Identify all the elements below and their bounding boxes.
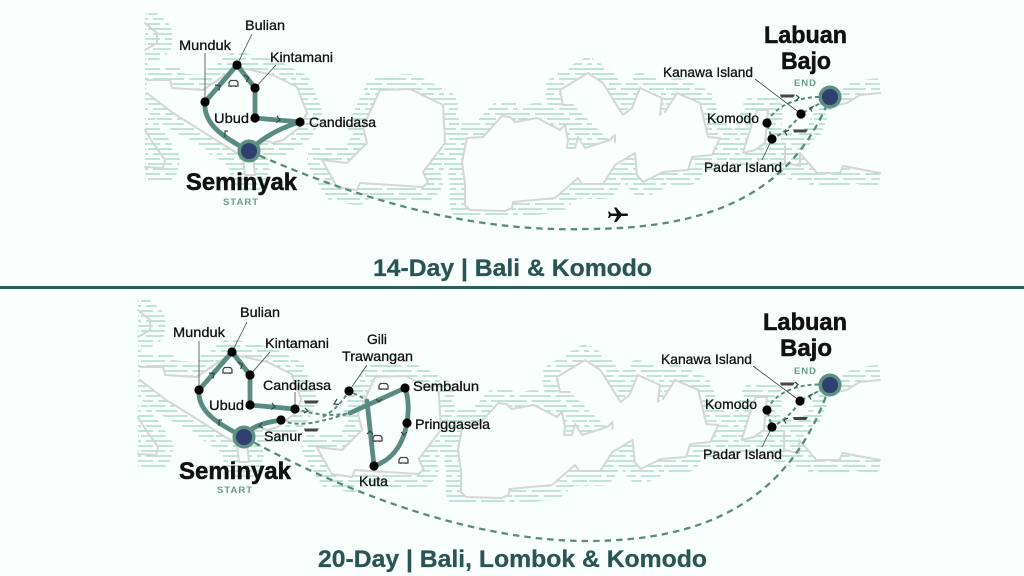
stop: Kanawa Island — [796, 109, 806, 119]
stop: Ubud — [250, 113, 260, 123]
stop: Komodo — [762, 118, 772, 128]
labels: START — [223, 197, 258, 208]
labels — [179, 17, 847, 208]
icon: car two — [379, 384, 388, 390]
labels: Labuan — [763, 309, 847, 336]
direction arrows — [209, 362, 813, 435]
icon: boat two — [793, 130, 808, 132]
labels: Munduk — [179, 37, 232, 53]
ferry routes — [767, 97, 831, 139]
labels: END — [794, 78, 816, 89]
labels: Ubud — [214, 110, 249, 126]
start marker: Seminyak — [234, 427, 254, 447]
labels: Bulian — [245, 17, 285, 33]
divider — [0, 286, 1024, 289]
ferry routes — [281, 391, 367, 424]
icon: car four — [399, 458, 408, 464]
route map: 20-day — [173, 304, 847, 541]
title: 14-day: 14-Day | Bali & Komodo — [373, 255, 652, 282]
end marker: Labuan Bajo — [820, 375, 840, 395]
flight route — [249, 97, 830, 229]
icon: boat two — [304, 428, 319, 432]
stop: Bulian — [232, 60, 242, 70]
stop: Sanur — [276, 415, 286, 425]
title: 20-day: 20-Day | Bali, Lombok & Komodo — [318, 546, 707, 573]
route map: 14-day — [179, 17, 847, 229]
labels: Komodo — [705, 396, 757, 412]
labels: Munduk — [173, 324, 226, 340]
labels: Bajo — [780, 335, 832, 362]
end marker: Labuan Bajo — [820, 87, 840, 107]
land routes — [199, 352, 408, 466]
labels: Kanawa Island — [663, 64, 753, 80]
icon: boat one — [304, 400, 319, 404]
labels: Pringgasela — [415, 416, 490, 432]
icon: boat four — [793, 417, 808, 420]
stop: Padar Island — [767, 134, 777, 144]
icon: car three — [373, 436, 382, 442]
stop: Ubud — [245, 400, 255, 410]
stop: Candidasa — [295, 117, 305, 127]
labels: Seminyak — [186, 169, 298, 196]
labels: Padar Island — [704, 159, 782, 175]
labels: Sanur — [264, 428, 302, 444]
labels: END — [794, 366, 816, 377]
stop: Kanawa Island — [795, 396, 805, 406]
labels: Sembalun — [413, 378, 479, 394]
icon: car — [229, 80, 238, 87]
labels — [173, 304, 847, 496]
stop: Pringgasela — [402, 418, 412, 428]
stop: Kintamani — [250, 83, 260, 93]
labels: Candidasa — [309, 114, 376, 130]
labels: Kanawa Island — [661, 351, 752, 367]
start marker: Seminyak — [239, 141, 259, 161]
labels: Gili — [367, 331, 387, 347]
leader lines — [199, 322, 800, 447]
stop: Kuta — [369, 461, 379, 471]
direction arrows — [215, 75, 814, 137]
icon: car one — [223, 368, 232, 374]
stop: Munduk — [200, 97, 210, 107]
labels: Kuta — [359, 473, 388, 489]
stop: Bulian — [227, 347, 237, 357]
labels: Komodo — [707, 110, 759, 126]
labels: Bajo — [781, 48, 831, 75]
stop: Munduk — [194, 385, 204, 395]
labels: Seminyak — [179, 458, 292, 485]
stop: Candidasa — [290, 404, 300, 414]
stop: Gili Trawangan — [344, 386, 354, 396]
Komodo ferry routes — [767, 384, 830, 427]
icon: boat one — [780, 94, 795, 98]
stop: Sembalun — [400, 383, 410, 393]
stop: Komodo — [762, 405, 772, 415]
labels: START — [217, 485, 252, 496]
leader lines — [205, 34, 801, 160]
labels: Padar Island — [703, 446, 782, 462]
labels: Kintamani — [270, 49, 333, 65]
map: 14-day base geography — [145, 12, 880, 217]
icon: boat three — [780, 382, 795, 386]
labels: Labuan — [764, 22, 847, 49]
land route — [205, 65, 300, 151]
flight route — [244, 385, 830, 541]
icon: plane — [608, 208, 628, 222]
labels: Bulian — [240, 304, 280, 320]
labels: Candidasa — [263, 377, 331, 393]
map: 20-day base geography — [138, 299, 880, 504]
stop: Kintamani — [245, 370, 255, 380]
stop: Padar Island — [767, 422, 777, 432]
labels: Kintamani — [265, 335, 329, 351]
labels: Trawangan — [342, 348, 413, 364]
labels: Ubud — [209, 397, 244, 413]
